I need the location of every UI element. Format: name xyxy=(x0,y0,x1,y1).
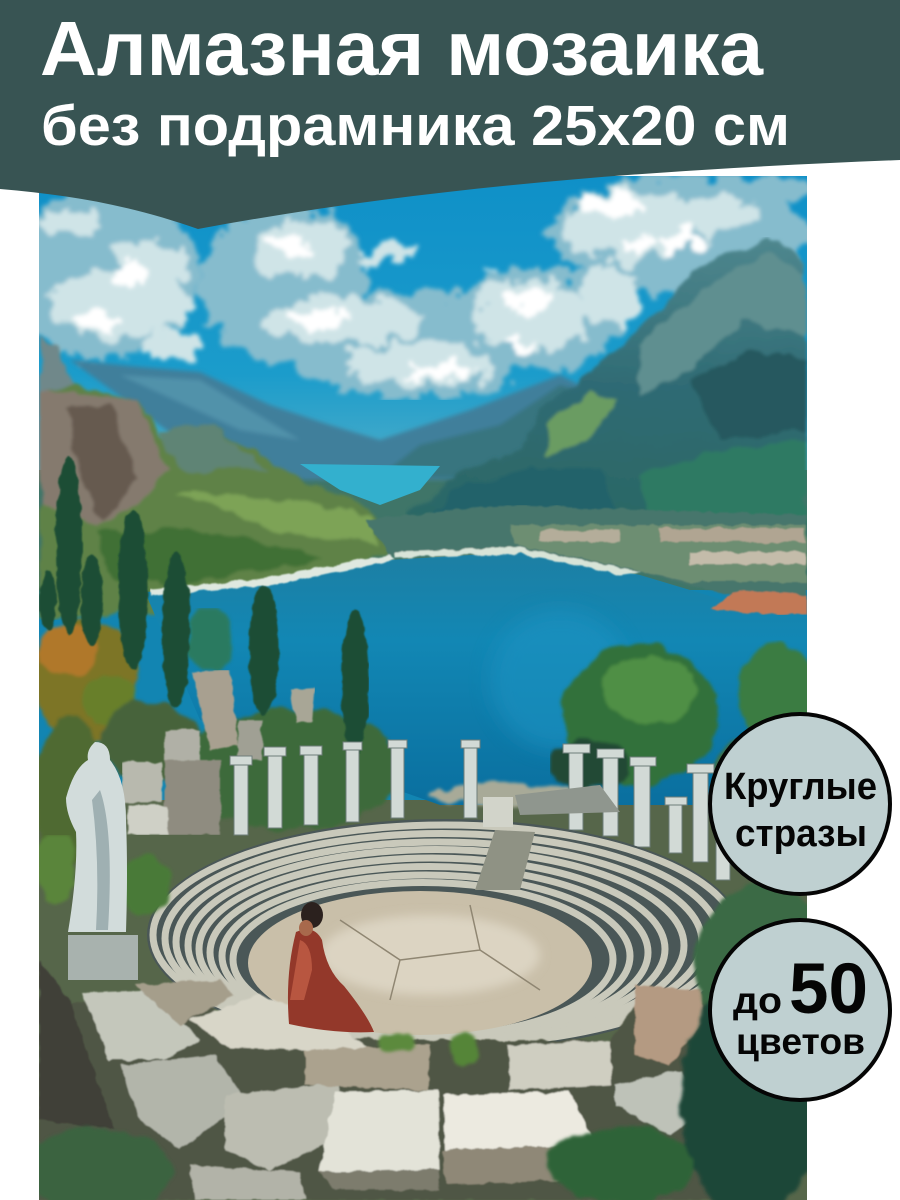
cypress trees xyxy=(39,455,369,754)
painting: Greek amphitheatre above a mountain lake xyxy=(10,174,835,1200)
ruined stone blocks xyxy=(122,670,315,835)
badge: round rhinestones: Круглые xyxy=(724,766,877,808)
central staircase xyxy=(475,830,535,890)
foreground stone terraces xyxy=(39,960,760,1200)
badge: up to 50 colours: цветов xyxy=(736,1021,865,1062)
distant water xyxy=(300,464,440,505)
amphitheatre seating xyxy=(147,785,743,1051)
badge: round rhinestones xyxy=(710,714,890,894)
colonnade xyxy=(230,740,730,880)
seated woman in a red dress xyxy=(288,902,374,1032)
far shore and town xyxy=(150,505,807,615)
title: Алмазная мозаика xyxy=(40,6,764,92)
greenery, foreground xyxy=(25,835,835,1200)
stone block on the rim xyxy=(483,797,513,827)
badge: up to 50 colours: 50 xyxy=(789,950,868,1029)
large trees, right xyxy=(550,640,807,789)
left cliff and green slopes xyxy=(39,330,395,620)
marble statue xyxy=(66,742,138,980)
trees and vegetation behind the ruins xyxy=(33,455,830,865)
subtitle: без подрамника 25х20 см xyxy=(41,94,790,158)
badge: up to 50 colours xyxy=(710,920,890,1100)
painted background layers xyxy=(39,176,807,1200)
stage floor xyxy=(248,891,592,1035)
orange and green bushes, left xyxy=(33,608,610,865)
far mountains xyxy=(70,360,610,480)
big right mountain xyxy=(405,237,807,535)
header banner xyxy=(0,0,900,229)
badge: round rhinestones: стразы xyxy=(735,813,867,855)
lake xyxy=(145,552,807,805)
clouds xyxy=(10,174,815,400)
badge: up to 50 colours: до xyxy=(733,980,782,1021)
